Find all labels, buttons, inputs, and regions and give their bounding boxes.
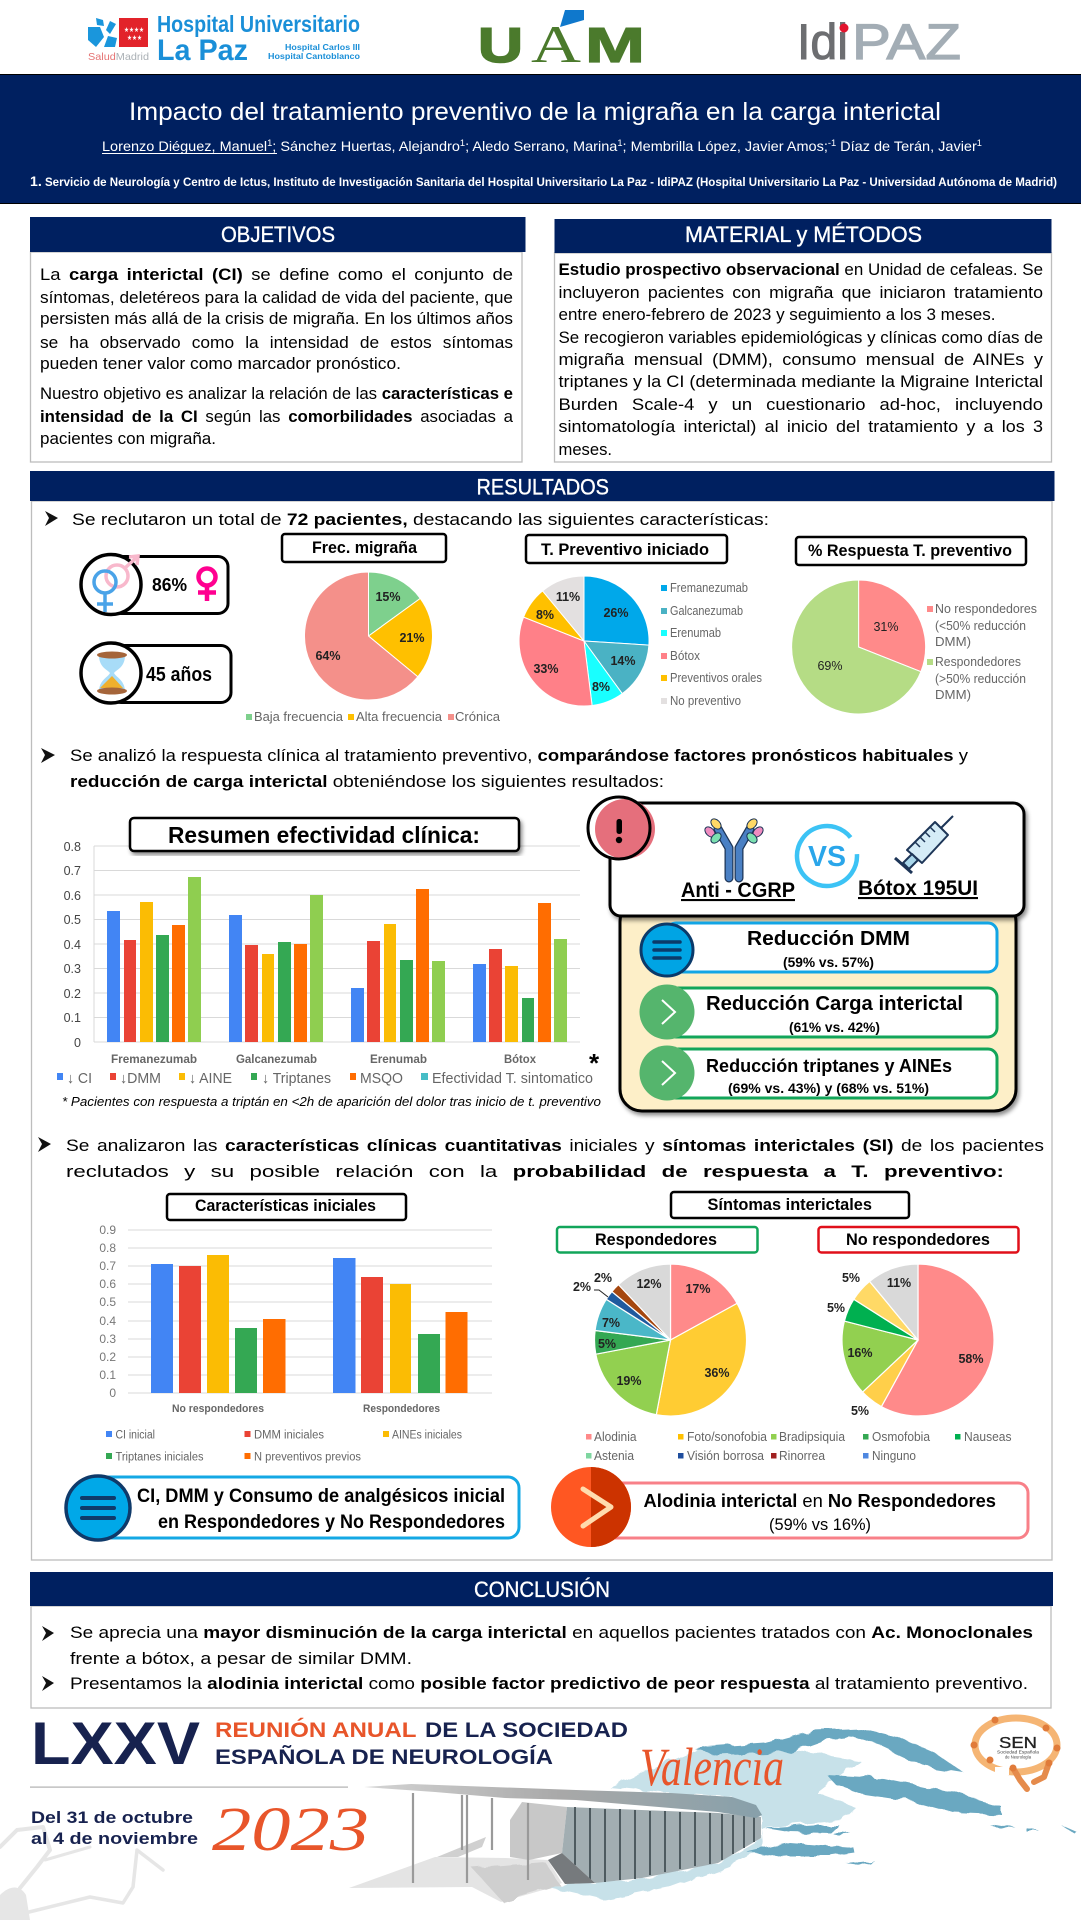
legend: preventivo [661,581,762,708]
legend: caracteristicas iniciales: CI inicial [116,1430,155,1442]
bar chart: resumen efectividad: 0 [74,1036,81,1050]
bar chart: resumen efectividad: 0.8 [64,840,81,854]
asterisk: * [589,1048,600,1078]
header banner [0,74,1081,204]
logo: UAM: M [585,19,645,73]
legend: respuesta: Respondedores [935,655,1021,669]
logo: SEN: SEN [999,1735,1037,1752]
pie chart: sintomas respondedores: 2% [573,1280,591,1294]
result: reduccion triptanes y aines: (69% vs. 43%) y (68% vs. 51%) [728,1081,929,1096]
bar chart: resumen efectividad: 0.3 [64,962,81,976]
label box: resumen efectividad clinica [130,818,519,851]
label: anti-cgrp: Anti - CGRP [681,879,795,902]
text block: material y metodos: migraña mensual (DMM), consumo mensual de AINEs y [558,351,1044,369]
bar chart: resumen efectividad [64,840,580,1066]
title: LXXV: LXXV [31,1710,200,1777]
dates [31,1809,198,1848]
pie chart: sintomas respondedores: 12% [636,1277,662,1291]
dates: Del 31 de octubre [31,1809,193,1827]
logo: Hospital Universitario La Paz: Hospital Cantoblanco [268,51,360,61]
bar chart: caracteristicas iniciales: 0.2 [99,1350,116,1364]
bar chart: resumen efectividad: 0.1 [64,1011,81,1025]
text: conclusion 1 [70,1623,1033,1668]
text block: objetivos: persisten más allá de la crisis de migraña. En los últimos años [40,310,513,328]
icon: syringe [895,816,953,873]
congress name: REUNIÓN ANUAL [215,1718,417,1742]
bar chart: caracteristicas iniciales [99,1223,492,1415]
legend: preventivo: Fremanezumab [670,581,748,595]
pie chart: preventivo: 11% [556,590,580,604]
year 2023: 2023 [212,1796,369,1864]
authors: 1 [617,138,623,148]
icon: alert [588,797,655,859]
legend: frecuencia: Crónica [455,710,500,724]
result: reduccion triptanes y aines [640,1046,997,1100]
bar chart: caracteristicas iniciales: No respondedores [172,1403,264,1415]
logo: Hospital Universitario La Paz: ★★★ [127,34,142,42]
legend: sintomas [586,1430,1012,1463]
arrow bullet 1 [45,511,58,526]
logo: SEN [970,1716,1060,1789]
legend: efectividad: ↓ CI [67,1071,92,1087]
logo: IdiPAZ: PAZ [852,14,961,70]
logo: Hospital Universitario La Paz: La Paz [157,34,248,67]
text block: material y metodos: Burden Scale-4 y un cuestionario ad-hoc, incluyendo [558,396,1043,414]
legend: respuesta: DMM) [935,688,971,702]
legend: frecuencia: Alta frecuencia [356,710,442,724]
pie chart: sintomas respondedores: 2% [594,1271,612,1285]
bar chart: resumen efectividad: 0.2 [64,987,81,1001]
label box: respuesta: % Respuesta T. preventivo [808,542,1012,560]
label box: respuesta [796,537,1026,565]
dates: al 4 de noviembre [31,1830,198,1848]
legend: preventivo: Erenumab [670,626,721,640]
legend: efectividad: Efectividad T. sintomatico [432,1071,593,1087]
callout: CI DMM analgesicos [66,1476,519,1540]
icon: antibody [703,817,765,878]
legend: respuesta [927,602,1037,702]
authors: -1 [828,138,836,148]
legend: sintomas: Osmofobia [872,1430,930,1444]
legend: sintomas: Foto/sonofobia [687,1430,767,1444]
pie chart: sintomas respondedores: 7% [602,1316,620,1330]
legend: respuesta: (<50% reducción [935,619,1026,633]
affiliation: 1. Servicio de Neurología y Centro de Ictus, Instituto de Investigación Sanitaria del Hospital Universitario La Paz - IdiPAZ (Hospital Universitario La Paz - Universidad Autónoma de Madrid) [30,173,1057,189]
callout: alodinia interictal [551,1467,1028,1547]
text block: objetivos: pueden tener valor como marcador pronóstico. [40,355,401,373]
callout: CI DMM analgesicos: CI, DMM y Consumo de analgésicos inicial [137,1486,505,1507]
text block: material y metodos: triptanes y la CI (determinada mediante la Migraine Interictal [558,373,1043,391]
logo: Hospital Universitario La Paz [88,11,360,67]
result: reduccion DMM: Reducción DMM [747,928,910,950]
bar chart: caracteristicas iniciales: 0.5 [99,1295,116,1309]
legend: sintomas: Alodinia [594,1430,637,1444]
logo: SEN: de Neurología [1005,1754,1031,1760]
legend: frecuencia [246,710,500,724]
text block: objetivos: La carga interictal (CI) se define como el conjunto de [40,266,513,284]
label box: respondedores [557,1227,758,1252]
panel: conclusion [30,1572,1053,1708]
bar chart: caracteristicas iniciales: 0.4 [99,1314,116,1328]
stat: sexo 86% [81,554,228,614]
callout: alodinia interictal: (59% vs 16%) [769,1515,871,1534]
bar chart: resumen efectividad: 0.7 [64,864,81,878]
title: Impacto del tratamiento preventivo de la migraña en la carga interictal [129,98,941,126]
result: reduccion carga interictal [640,984,997,1040]
legend: caracteristicas iniciales [106,1430,462,1464]
label box: sintomas interictales [671,1192,909,1218]
authors: ; Sánchez Huertas, Alejandro [272,138,460,154]
label box: frec. migraña: Frec. migraña [312,539,418,557]
bar chart: caracteristicas iniciales: Respondedores [363,1403,440,1415]
text block: objetivos: intensidad de la CI según las comorbilidades asociadas a [40,408,514,426]
legend: sintomas: Bradipsiquia [779,1430,845,1444]
legend: efectividad: ↓DMM [120,1071,161,1087]
pie chart: preventivo: 8% [592,680,610,694]
callout: CI DMM analgesicos: en Respondedores y No Respondedores [158,1512,505,1533]
pie chart: sintomas respondedores: 36% [704,1366,730,1380]
text: respuesta clinica: reducción de carga interictal obteniéndose los siguientes resultados: [70,772,664,791]
result: reduccion carga interictal: (61% vs. 42%) [789,1020,880,1035]
logo: SEN: Sociedad Española [997,1750,1040,1754]
logo: IdiPAZ [797,14,961,70]
congress name: ESPAÑOLA DE NEUROLOGÍA [215,1746,553,1769]
legend: frecuencia: Baja frecuencia [254,710,343,724]
heading: conclusion: CONCLUSIÓN [474,1577,610,1602]
legend: respuesta: (>50% reducción [935,672,1026,686]
text block: material y metodos: Estudio prospectivo observacional en Unidad de cefaleas. Se [558,261,1043,279]
pie chart: sintomas no respondedores: 16% [847,1346,873,1360]
text: caracteristicas clinicas: Se analizaron las características clínicas cuantitativas iniciales y síntomas interictales (SI) de los pacientes [66,1136,1044,1155]
legend: efectividad: ↓ Triptanes [262,1071,331,1087]
pie chart: respuesta: 69% [817,659,843,673]
legend: preventivo: Galcanezumab [670,604,743,618]
text block: objetivos [40,266,514,448]
logo: Hospital Universitario La Paz: SaludMadrid [88,51,149,63]
bar chart: resumen efectividad: Fremanezumab [111,1054,197,1066]
pie chart: preventivo: 8% [536,608,554,622]
logo: UAM: U [478,19,523,73]
stat: sexo 86%: 86% [152,575,187,595]
pie chart: respuesta [792,580,926,714]
logo: UAM [478,10,645,74]
heading: resultados: RESULTADOS [476,474,609,500]
arrow bullet 3 [38,1137,51,1152]
building [349,1784,762,1902]
authors: 1 [977,138,982,148]
pie chart: sintomas no respondedores: 5% [842,1271,860,1285]
text block: material y metodos: Se recogieron variables epidemiológicas y clínicas como días de [558,329,1043,347]
bar chart: caracteristicas iniciales: 0.7 [99,1259,116,1273]
watercolor wash [548,1748,860,1900]
pie chart: sintomas respondedores [573,1264,747,1416]
pie chart: sintomas respondedores: 19% [616,1374,642,1388]
panel: anti-CGRP vs botox [588,797,1024,1111]
bar chart: resumen efectividad: Galcanezumab [236,1054,317,1066]
label box: respondedores: Respondedores [595,1231,717,1249]
text: caracteristicas clinicas: reclutados y su posible relación con la probabilidad de respuesta a T. preventivo: [66,1162,1004,1181]
text: caracteristicas clinicas [66,1136,1044,1181]
logo: IdiPAZ: Idi [797,14,848,70]
pie chart: sintomas no respondedores: 58% [958,1352,984,1366]
label: botox 195UI: Bótox 195UI [858,877,978,900]
pie chart: preventivo: 33% [533,662,559,676]
text block: objetivos: síntomas, deletéreos para la calidad de vida del paciente, que [40,289,513,307]
result: reduccion DMM [641,923,997,976]
logo: Hospital Universitario La Paz: Hospital Universitario [157,11,360,37]
text block: objetivos: se ha observado como la intensidad de estos síntomas [40,334,513,352]
label box: resumen efectividad clinica: Resumen efectividad clínica: [168,822,480,848]
text block: objetivos: pacientes con migraña. [40,430,216,448]
authors: 1 [267,138,272,148]
comparison box [610,803,1024,916]
legend: preventivo: Bótox [670,649,701,663]
pie chart: sintomas no respondedores [827,1264,994,1418]
label box: caracteristicas iniciales: Características iniciales [195,1197,376,1215]
watercolor brush strokes [694,1728,1077,1865]
label box: no respondedores: No respondedores [846,1231,990,1249]
neuron watermark [0,1827,163,1920]
legend: efectividad [57,1071,593,1087]
bar chart: resumen efectividad: Bótox [504,1054,537,1066]
heading: material y metodos: MATERIAL y MÉTODOS [685,222,922,247]
arrow bullet [42,1676,54,1691]
pie chart: sintomas no respondedores: 11% [887,1276,911,1290]
result: reduccion carga interictal: Reducción Carga interictal [706,993,963,1015]
label box: t. preventivo iniciado: T. Preventivo iniciado [541,541,709,559]
legend: caracteristicas iniciales: DMM iniciales [254,1430,324,1442]
bar chart: caracteristicas iniciales: 0 [109,1386,116,1400]
bar chart: caracteristicas iniciales: 0.6 [99,1277,116,1291]
legend: sintomas: Rinorrea [779,1449,825,1463]
legend: preventivo: No preventivo [670,694,741,708]
arrow bullet 2 [41,748,55,763]
city Valencia: Valencia [640,1737,784,1797]
text: respuesta clinica: Se analizó la respuesta clínica al tratamiento preventivo, comparándose factores pronósticos habituales y [70,746,969,765]
legend: caracteristicas iniciales: Triptanes iniciales [116,1452,204,1464]
heading: objetivos: OBJETIVOS [221,222,335,247]
legend: preventivo: Preventivos orales [670,671,762,685]
text: reclutamiento: Se reclutaron un total de 72 pacientes, destacando las siguientes características: [72,510,769,529]
authors: ; Aledo Serrano, Marina [465,138,618,154]
stat: edad 45 años [81,643,231,703]
panel: material y metodos [554,219,1052,462]
label box: frec. migraña [282,534,446,562]
stat: edad 45 años: 45 años [146,664,212,686]
legend: efectividad: ↓ AINE [189,1071,232,1087]
label box: caracteristicas iniciales [167,1194,406,1220]
pie chart: sintomas no respondedores: 5% [827,1301,845,1315]
legend: efectividad: MSQO [360,1071,403,1087]
label box: t. preventivo iniciado [526,535,727,563]
pie chart: preventivo: 26% [603,606,629,620]
text block: objetivos: Nuestro objetivo es analizar la relación de las características e [40,385,513,403]
authors: Díaz de Terán, Javier [836,138,977,154]
bar chart: resumen efectividad: 0.4 [64,938,81,952]
legend: sintomas: Nauseas [964,1430,1012,1444]
pie chart: preventivo: 14% [610,654,636,668]
arrow bullet [42,1626,54,1641]
text block: material y metodos: entre enero-febrero de 2023 y seguimiento a los 3 meses. [558,306,996,324]
text block: material y metodos: sintomatología interictal) al inicio del tratamiento y a los 3 [558,418,1043,436]
pie chart: sintomas respondedores: 5% [598,1337,616,1351]
logo: Hospital Universitario La Paz: ★★★★ [124,26,144,34]
label box: no respondedores [818,1227,1018,1252]
text: conclusion 1: Se aprecia una mayor disminución de la carga interictal en aquellos pacientes tratados con Ac. Monoclonales [70,1623,1033,1642]
text: conclusion 2: Presentamos la alodinia interictal como posible factor predictivo de peor respuesta al tratamiento preventivo. [70,1674,1028,1693]
result: reduccion triptanes y aines: Reducción triptanes y AINEs [706,1056,952,1076]
icon: vs [785,814,869,898]
callout: alodinia interictal: Alodinia interictal en No Respondedores [644,1490,996,1511]
pie chart: respuesta: 31% [873,620,899,634]
cream results box [620,900,1016,1111]
footer: congress banner [0,1710,1077,1920]
pie chart: sintomas respondedores: 17% [685,1282,711,1296]
congress name: DE LA SOCIEDAD [425,1719,628,1742]
text block: material y metodos: meses. [558,441,612,459]
legend: caracteristicas iniciales: AINEs iniciales [392,1430,462,1442]
congress name [215,1718,628,1769]
bar chart: caracteristicas iniciales: 0.3 [99,1332,116,1346]
legend: sintomas: Astenia [594,1449,634,1463]
bar chart: caracteristicas iniciales: 0.8 [99,1241,116,1255]
legend: respuesta: DMM) [935,635,971,649]
icon: vs: VS [808,841,846,873]
pie chart: frecuencia [304,572,433,700]
logo: Hospital Universitario La Paz: Hospital Carlos III [285,42,360,52]
logo: UAM: A [531,16,581,74]
text: conclusion 1: frente a bótox, a pesar de similar DMM. [70,1649,412,1668]
legend: sintomas: Ninguno [872,1449,916,1463]
authors: Lorenzo Diéguez, Manuel [102,138,262,154]
pie chart: preventivo [519,576,649,706]
authors: 1 [460,138,465,148]
pie chart: frecuencia: 64% [315,649,341,663]
bar chart: resumen efectividad: 0.5 [64,913,81,927]
text: respuesta clinica [70,746,969,791]
pie chart: frecuencia: 21% [399,631,425,645]
pie chart: frecuencia: 15% [375,590,401,604]
panel: objetivos [30,217,526,462]
divider [30,1786,348,1788]
pie chart: sintomas no respondedores: 5% [851,1404,869,1418]
bar chart: caracteristicas iniciales: 0.1 [99,1368,116,1382]
result: reduccion DMM: (59% vs. 57%) [783,955,874,970]
bar chart: caracteristicas iniciales: 0.9 [99,1223,116,1237]
bar chart: resumen efectividad: Erenumab [370,1054,427,1066]
legend: caracteristicas iniciales: N preventivos previos [254,1452,361,1464]
legend: respuesta: No respondedores [935,602,1037,616]
footnote: * Pacientes con respuesta a triptán en <2h de aparición del dolor tras inicio de t. preventivo [62,1094,601,1109]
bar chart: resumen efectividad: 0.6 [64,889,81,903]
panel: resultados [30,471,1054,1560]
authors: ; Membrilla López, Javier Amos; [623,138,828,154]
label box: sintomas interictales: Síntomas interictales [708,1196,872,1214]
text block: material y metodos [558,261,1044,459]
text block: material y metodos: incluyeron pacientes con migraña que iniciaron tratamiento [558,284,1043,302]
legend: sintomas: Visión borrosa [687,1449,764,1463]
